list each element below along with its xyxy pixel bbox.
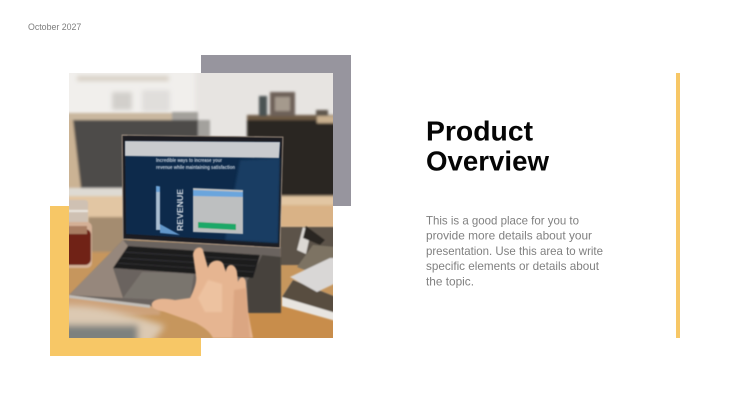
form card	[193, 188, 243, 234]
body text: presentation. Use this area to write	[426, 244, 603, 258]
screen headline: revenue while maintaining satisfaction	[156, 165, 235, 171]
yellow vertical bar	[676, 73, 680, 338]
screen display	[125, 141, 280, 243]
cabinets and table back	[60, 92, 345, 345]
laptop	[69, 135, 283, 313]
jam jar	[62, 200, 92, 268]
desk objects on the right	[280, 226, 338, 321]
screen headline: Incredible ways to increase your	[156, 158, 222, 164]
body text: This is a good place for you to	[426, 214, 579, 228]
title: Overview	[426, 146, 550, 176]
screen headline	[156, 158, 235, 171]
date label: October 2027	[28, 22, 81, 32]
blurred foreground arm	[60, 306, 165, 345]
title	[426, 116, 550, 176]
body text	[426, 214, 603, 288]
title: Product	[426, 116, 533, 146]
photo: laptop on a wooden desk	[69, 73, 333, 338]
yellow accent square	[50, 206, 201, 356]
browser bar	[125, 141, 280, 158]
touchpad	[123, 272, 194, 301]
body text: the topic.	[426, 274, 474, 288]
photo base	[69, 73, 333, 338]
revenue book strip	[156, 186, 180, 235]
hand touching trackpad	[152, 248, 253, 338]
background wall and shelf	[60, 65, 345, 200]
vertical revenue label: REVENUE	[175, 189, 185, 231]
keyboard	[113, 246, 260, 278]
body text: provide more details about your	[426, 229, 592, 243]
laptop base	[69, 240, 281, 313]
laptop screen bezel	[122, 135, 283, 248]
body text: specific elements or details about	[426, 259, 600, 273]
grey accent square	[201, 55, 351, 206]
